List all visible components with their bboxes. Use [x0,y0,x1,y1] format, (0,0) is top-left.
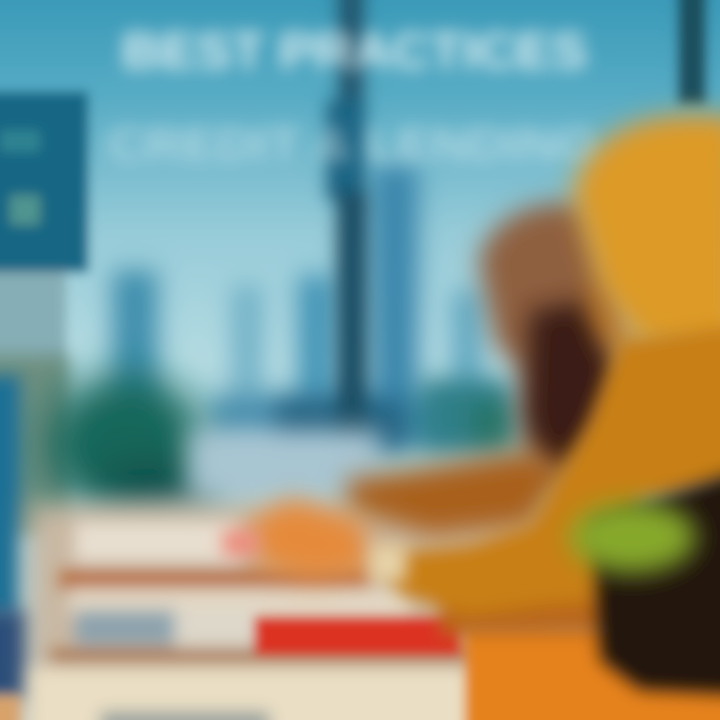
left edge blue column [0,375,20,615]
dark foreground city base [275,380,515,450]
tower side block [372,165,418,435]
person in the back: brown hair [478,202,620,480]
person in front: mustard hood and jacket [375,115,720,615]
headline text [108,23,598,170]
left teal panel [0,92,88,362]
hand on the desk [245,498,375,580]
red book [255,617,460,655]
black plant pot [592,470,720,695]
headline text: BEST PRACTICES [122,23,587,79]
left foreground column underlay [0,355,70,535]
pale street band behind desk [190,430,380,495]
left foreground trees [45,375,215,515]
desk with stacked books [30,505,540,720]
dark post top right [678,0,706,104]
distant skyline [112,270,500,445]
orange table [465,630,720,720]
green plant [568,501,696,573]
arms of back person [345,450,570,535]
central tower [326,0,368,445]
headline text: CREDIT & LENDING [108,118,598,170]
brown shadow above table [440,575,620,635]
